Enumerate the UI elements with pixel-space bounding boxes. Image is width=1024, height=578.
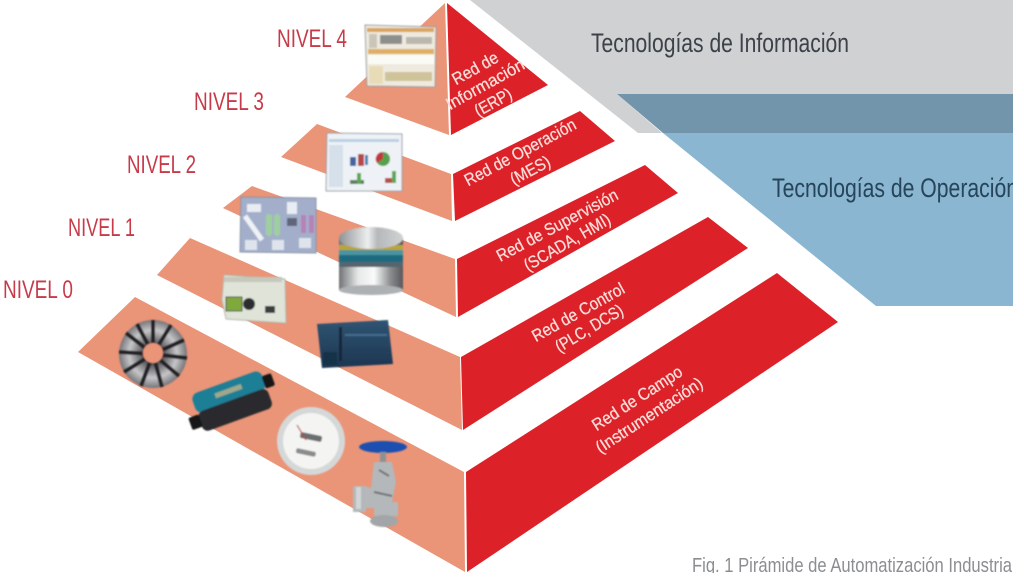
icon: gate valve bbox=[353, 441, 407, 527]
icon: ERP screenshot bbox=[365, 25, 436, 87]
red label: Red de Información (ERP): Información bbox=[443, 55, 528, 114]
icon: turbine wheel bbox=[119, 320, 187, 388]
panel: Tecnologías de Información bbox=[470, 0, 1013, 133]
label: NIVEL 0: NIVEL 0 bbox=[3, 276, 73, 304]
label: NIVEL 2: NIVEL 2 bbox=[127, 151, 196, 179]
level 2 salmon face bbox=[223, 186, 456, 317]
red label: Red de Operación (MES): Red de Operación bbox=[461, 115, 579, 190]
level 0 red face bbox=[466, 273, 838, 572]
panel: Tecnologías de Operación bbox=[617, 94, 1018, 306]
red label: Red de Información (ERP): Red de bbox=[449, 48, 502, 89]
level 3 red face bbox=[453, 111, 615, 221]
level 2 red face bbox=[457, 165, 678, 317]
red label: Red de Campo (Instrumentación): Red de Campo bbox=[588, 362, 686, 435]
red label: Red de Operación (MES): (MES) bbox=[507, 152, 554, 189]
red label: Red de Supervisión (SCADA, HMI): Red de Supervisión bbox=[493, 185, 621, 266]
red label: Red de Supervisión (SCADA, HMI): (SCADA, HMI) bbox=[520, 210, 614, 275]
level 1 red face bbox=[461, 217, 748, 430]
icon: blue PLC module bbox=[317, 320, 393, 368]
icon: MES dashboard bbox=[326, 133, 402, 191]
red label: Red de Información (ERP): (ERP) bbox=[471, 84, 515, 120]
icon: database cylinder bbox=[339, 227, 403, 295]
level 1 salmon face bbox=[157, 238, 462, 430]
icon: PLC controller bbox=[222, 275, 286, 323]
level 4 salmon face bbox=[345, 3, 449, 135]
icon: SCADA panel bbox=[240, 197, 316, 253]
icon: pressure gauge bbox=[277, 407, 345, 475]
icon: flow meter bbox=[181, 366, 282, 436]
label: Tecnologías de Información: Tecnologías de Información bbox=[591, 28, 849, 58]
label: NIVEL 1: NIVEL 1 bbox=[68, 214, 135, 242]
level 4 red face bbox=[447, 3, 548, 135]
label: NIVEL 3: NIVEL 3 bbox=[194, 88, 264, 116]
level 3 salmon face bbox=[281, 124, 452, 221]
label: NIVEL 4: NIVEL 4 bbox=[277, 25, 347, 53]
red label: Red de Campo (Instrumentación): (Instrumentación) bbox=[592, 374, 706, 457]
level 0 salmon face bbox=[78, 297, 465, 572]
red label: Red de Control (PLC, DCS): Red de Control bbox=[529, 279, 628, 346]
red label: Red de Control (PLC, DCS): (PLC, DCS) bbox=[552, 301, 627, 356]
